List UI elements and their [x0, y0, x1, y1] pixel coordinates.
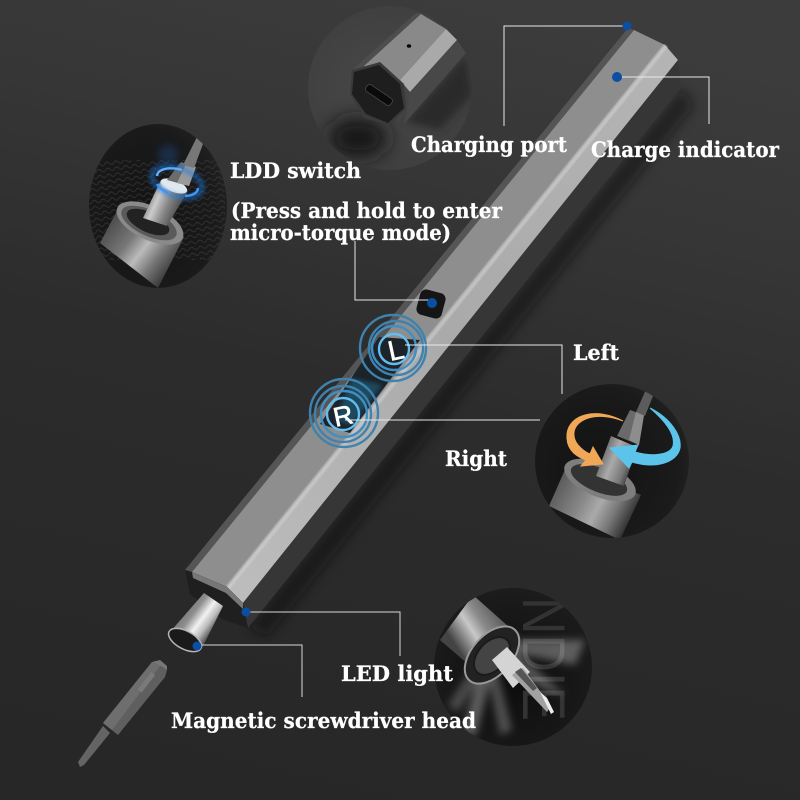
arrow: orange left rotation	[567, 414, 623, 466]
callout: charge indicator line	[618, 77, 709, 124]
icon: L ring button: L	[385, 333, 407, 367]
callout: LDD switch line	[355, 241, 431, 300]
panel: LDD switch inset	[85, 124, 227, 288]
label: Right: Right	[445, 446, 507, 471]
slider	[320, 337, 420, 433]
callout: right line	[345, 419, 540, 421]
label: LED light: LED light	[341, 661, 453, 686]
nose cylinder	[170, 593, 223, 648]
label: Left: Left	[573, 340, 619, 365]
panel: rotation direction inset	[535, 384, 689, 540]
icon: blue rotation rings	[148, 145, 206, 203]
arrow: cyan right rotation	[610, 408, 680, 468]
callout: charging port line	[504, 26, 628, 126]
label: Charge indicator: Charge indicator	[591, 137, 780, 162]
panel: screwdriver pen body	[165, 28, 694, 656]
label: press and hold line 2: micro-torque mode)	[230, 220, 451, 245]
light rays	[448, 640, 585, 735]
icon: R ring button: R	[331, 399, 356, 433]
panel: LED light inset	[434, 588, 592, 746]
label: press and hold line 1: (Press and hold to enter	[231, 198, 503, 223]
callout: magnetic head line	[197, 645, 302, 697]
label: Charging port: Charging port	[411, 132, 567, 157]
icon: R ring button	[310, 379, 378, 447]
callout: left line	[405, 345, 562, 394]
callout: LED line	[246, 612, 400, 656]
panel: charging port inset	[308, 6, 472, 170]
watermark text: NDIE	[510, 597, 577, 721]
button	[415, 288, 447, 320]
icon: port end body	[350, 13, 466, 126]
label: Magnetic screwdriver head: Magnetic screwdriver head	[171, 708, 476, 733]
icon: L ring button	[360, 315, 426, 381]
blue marker dots	[192, 22, 632, 650]
label: LDD switch: LDD switch	[230, 158, 361, 183]
icon: magnetic screwdriver bit	[78, 660, 167, 767]
